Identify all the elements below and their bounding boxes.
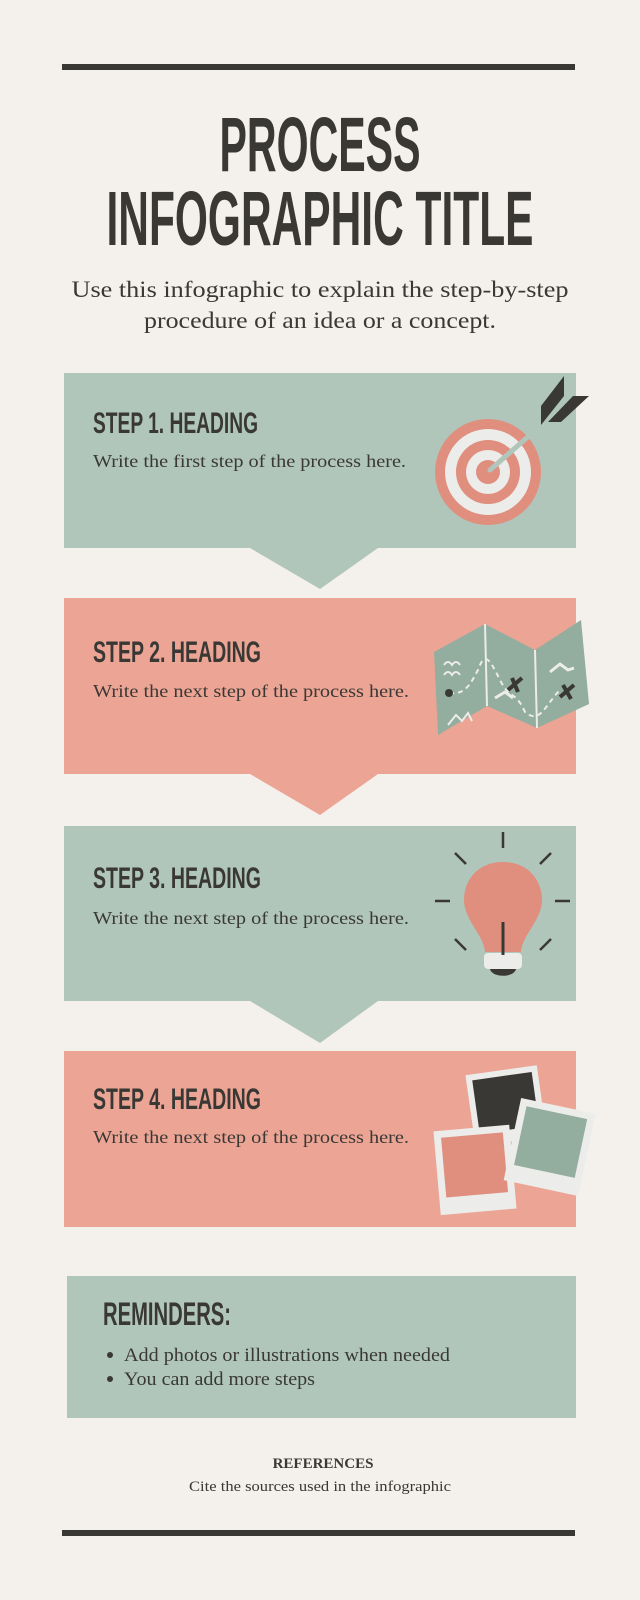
panel: step 4	[64, 1051, 595, 1227]
subtitle: Use this infographic to explain the step-by-step	[72, 277, 568, 302]
icon: photos	[433, 1065, 595, 1215]
step 3 heading: STEP 3. HEADING	[93, 862, 261, 895]
references: Cite the sources used in the infographic	[189, 1479, 451, 1495]
icon: target	[435, 376, 589, 525]
step 4 text: Write the next step of the process here.	[93, 1127, 409, 1147]
reminders list: You can add more steps	[124, 1370, 315, 1390]
reminders heading: REMINDERS:	[103, 1296, 231, 1332]
step 2 heading: STEP 2. HEADING	[93, 636, 261, 669]
subtitle	[72, 277, 568, 333]
title: PROCESS	[220, 102, 420, 188]
subtitle: procedure of an idea or a concept.	[144, 308, 496, 333]
step 1 text: Write the first step of the process here.	[93, 451, 406, 471]
step 2 text: Write the next step of the process here.	[93, 681, 409, 701]
reminders list: Add photos or illustrations when needed	[124, 1346, 451, 1366]
panel: step 3	[64, 826, 576, 1043]
reminders list	[107, 1346, 451, 1390]
step 4 heading: STEP 4. HEADING	[93, 1083, 261, 1116]
panel: step 2	[64, 598, 589, 815]
icon: map	[434, 620, 589, 735]
panel: step 1	[64, 373, 589, 589]
title	[106, 102, 534, 262]
references: REFERENCES	[273, 1456, 373, 1472]
references	[189, 1456, 451, 1495]
icon: light bulb	[435, 832, 570, 976]
step 1 heading: STEP 1. HEADING	[93, 407, 258, 440]
step 3 text: Write the next step of the process here.	[93, 908, 409, 928]
panel: reminders	[67, 1276, 576, 1418]
